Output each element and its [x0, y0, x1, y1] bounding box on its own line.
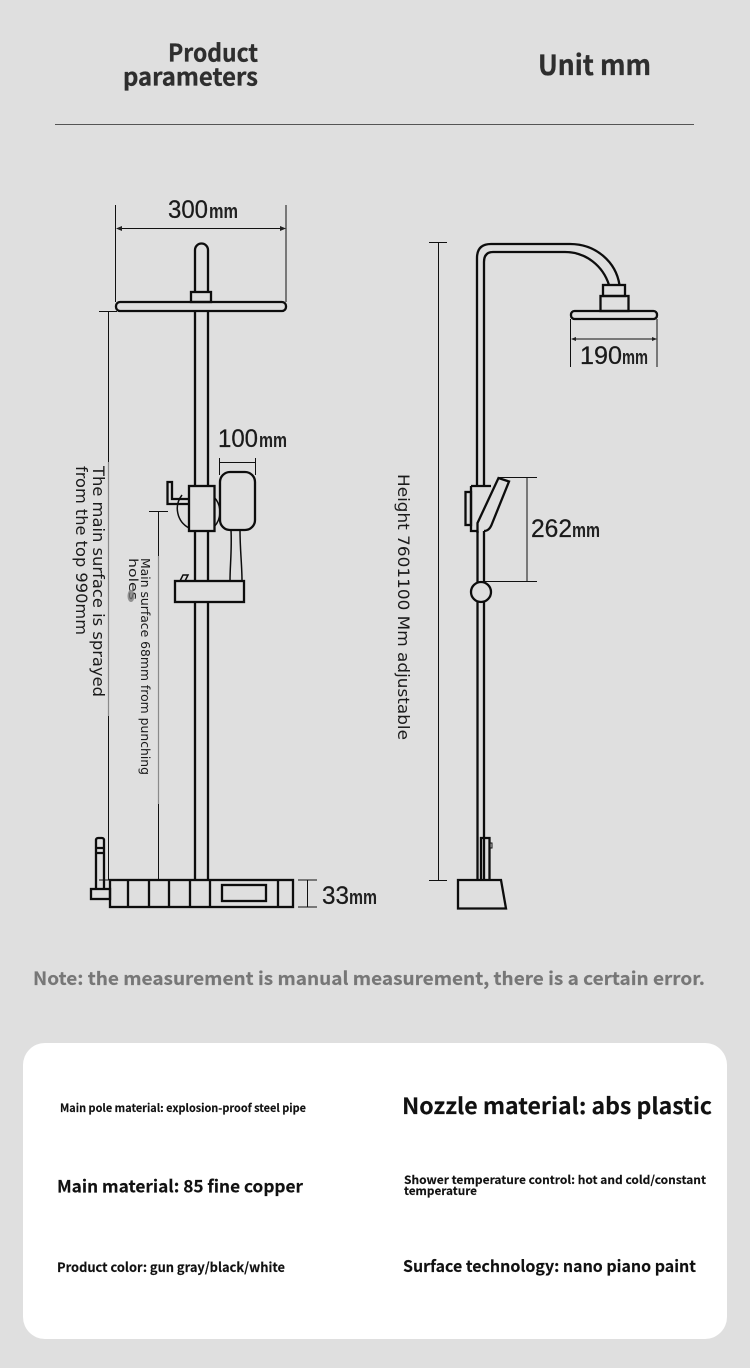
dimension: 262mm: 262 [531, 515, 572, 543]
note: Note: the measurement is manual measurement, there is a certain error. [33, 965, 705, 991]
icon: side base [458, 838, 506, 908]
dimension: 33mm [298, 880, 377, 910]
spec: main pole material: Main pole material: explosion-proof steel pipe [60, 1100, 306, 1116]
spec: nozzle material: Nozzle material: abs plastic [402, 1089, 712, 1121]
icon: pole and joint [471, 531, 491, 880]
icon: main pole [195, 311, 208, 880]
spec: product color: Product color: gun gray/black/white [57, 1257, 285, 1276]
title: product parameters: parameters [123, 58, 258, 92]
dimension: 33mm: 33 [322, 882, 349, 910]
dimension: 33mm: mm [349, 887, 377, 909]
dimension: main surface 990mm [72, 312, 117, 880]
front view diagram [72, 196, 377, 910]
dimension: 190mm: 190 [580, 342, 622, 370]
spec: surface technology: Surface technology: nano piano paint [403, 1253, 696, 1277]
icon: mixer valve base [91, 838, 293, 907]
title: product parameters: Product [168, 34, 258, 68]
title: product parameters [123, 34, 258, 92]
icon: curved shower arm [477, 244, 620, 486]
dimension: main surface 990mm: The main surface is sprayed [89, 465, 108, 697]
dimension: main surface 68mm: Main surface 68mm from punching [138, 558, 152, 775]
dimension: 100mm: 100 [218, 425, 258, 453]
dimension: 262mm [485, 478, 600, 582]
icon: handheld shower side view [466, 478, 509, 533]
dimension: 100mm: mm [259, 430, 287, 452]
icon: shower head side view [571, 285, 657, 319]
icon: handheld shower and bracket [168, 472, 255, 602]
dimension: 190mm [570, 319, 657, 370]
heading: unit: Unit mm [538, 44, 651, 84]
icon: shower head front view [116, 244, 286, 311]
spec: main material: Main material: 85 fine copper [57, 1172, 304, 1198]
dimension: main surface 68mm: holes [126, 558, 140, 600]
dimension: 300mm [116, 196, 286, 302]
dimension: height adjustable [394, 242, 447, 880]
dimension: 262mm: mm [572, 520, 600, 542]
dimension: main surface 990mm: from the top 990mm [72, 466, 91, 635]
dimension: main surface 68mm [126, 512, 168, 880]
spec: shower temperature control: Shower temperature control: hot and cold/constant [404, 1172, 706, 1188]
spec: shower temperature control [404, 1172, 706, 1199]
side view diagram [394, 242, 657, 908]
dimension: 190mm: mm [622, 347, 648, 369]
spec: shower temperature control: temperature [404, 1183, 477, 1199]
dimension: 100mm [218, 425, 287, 475]
dimension: 300mm: mm [209, 201, 238, 223]
panel: specifications [23, 1043, 727, 1339]
dimension: height adjustable: Height 7601100 Mm adjustable [394, 474, 413, 740]
dimension: 300mm: 300 [168, 196, 208, 224]
